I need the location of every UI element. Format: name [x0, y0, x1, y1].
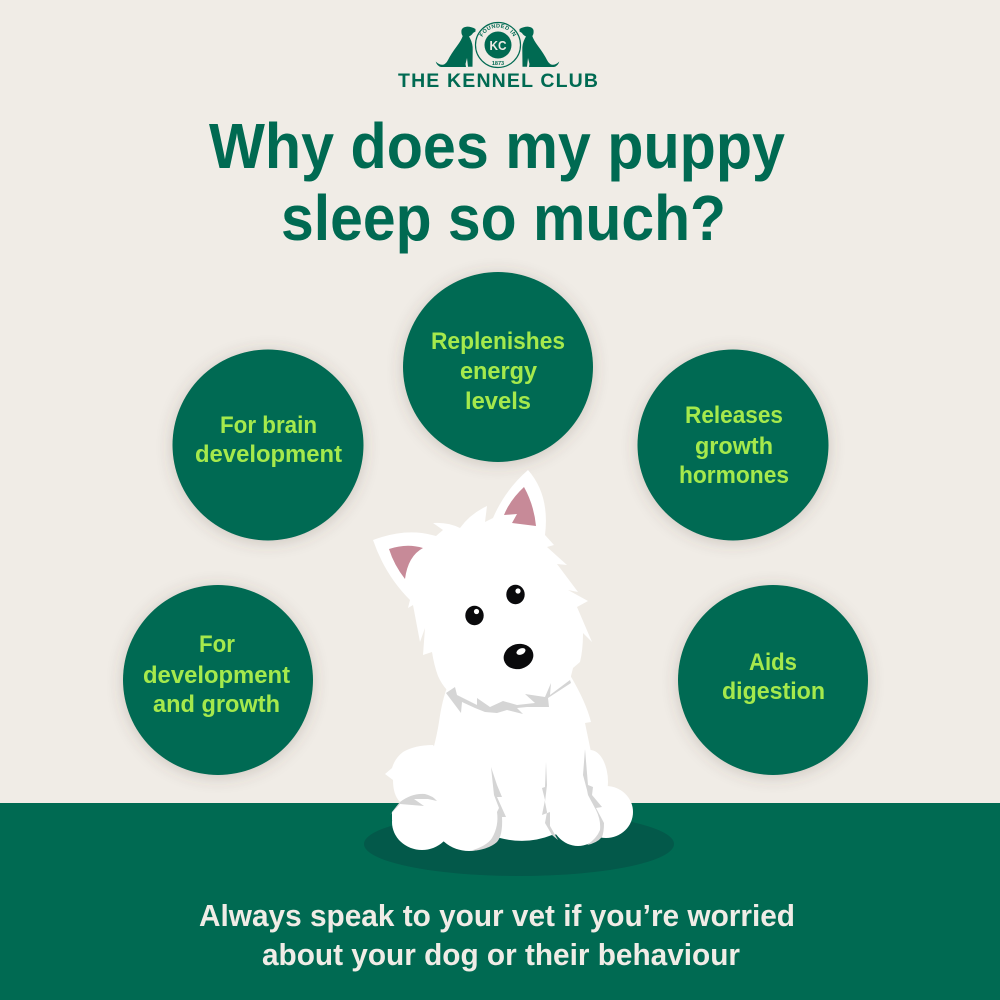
circle: replenishes energy levels: [403, 272, 593, 462]
puppy nose: [501, 641, 536, 672]
logo: The Kennel Club: [398, 22, 598, 92]
puppy head and ears: [373, 470, 592, 707]
dog shadow: [364, 812, 674, 876]
circle: releases growth hormones: growth: [695, 433, 773, 460]
circle: for brain development: development: [195, 441, 342, 468]
circle: releases growth hormones: Releases: [685, 402, 783, 429]
circle: for development and growth: [123, 585, 313, 775]
circle: for development and growth: and growth: [153, 691, 280, 718]
puppy body: [385, 675, 633, 851]
circle: replenishes energy levels: Replenishes: [431, 328, 565, 355]
circle: aids digestion: digestion: [722, 678, 825, 705]
logo roundel: FOUNDED IN: [479, 24, 516, 37]
title: Why does my puppy: [209, 110, 785, 182]
circle: for development and growth: development: [143, 662, 290, 689]
title: [209, 110, 785, 254]
puppy illustration: [373, 470, 633, 851]
right ear inner: [504, 487, 536, 526]
circle: releases growth hormones: [638, 350, 828, 540]
icon: right seated dog: [520, 27, 559, 67]
logo roundel: 1873: [492, 61, 504, 67]
footer message: Always speak to your vet if you’re worried: [199, 898, 795, 933]
circle: for brain development: For brain: [220, 412, 317, 439]
circle: replenishes energy levels: energy: [460, 358, 538, 385]
puppy collar fur shading: [446, 680, 571, 714]
puppy leg and paw shading: [390, 749, 604, 851]
circle: aids digestion: Aids: [749, 649, 797, 676]
logo roundel: [474, 22, 522, 68]
circle: releases growth hormones: hormones: [679, 462, 789, 489]
circle: for development and growth: For: [199, 631, 235, 658]
circle: replenishes energy levels: levels: [465, 388, 531, 415]
ground band: [0, 803, 1000, 1000]
logo roundel: KC: [490, 38, 507, 53]
title: sleep so much?: [281, 182, 726, 254]
icon: left seated dog: [436, 27, 476, 67]
logo wordmark: THE KENNEL CLUB: [398, 70, 598, 92]
puppy eyes: [465, 585, 525, 625]
left ear inner: [389, 546, 423, 579]
footer message: about your dog or their behaviour: [262, 937, 740, 972]
circle: for brain development: [172, 350, 364, 540]
footer message: [199, 898, 795, 972]
circle: aids digestion: [678, 585, 868, 775]
